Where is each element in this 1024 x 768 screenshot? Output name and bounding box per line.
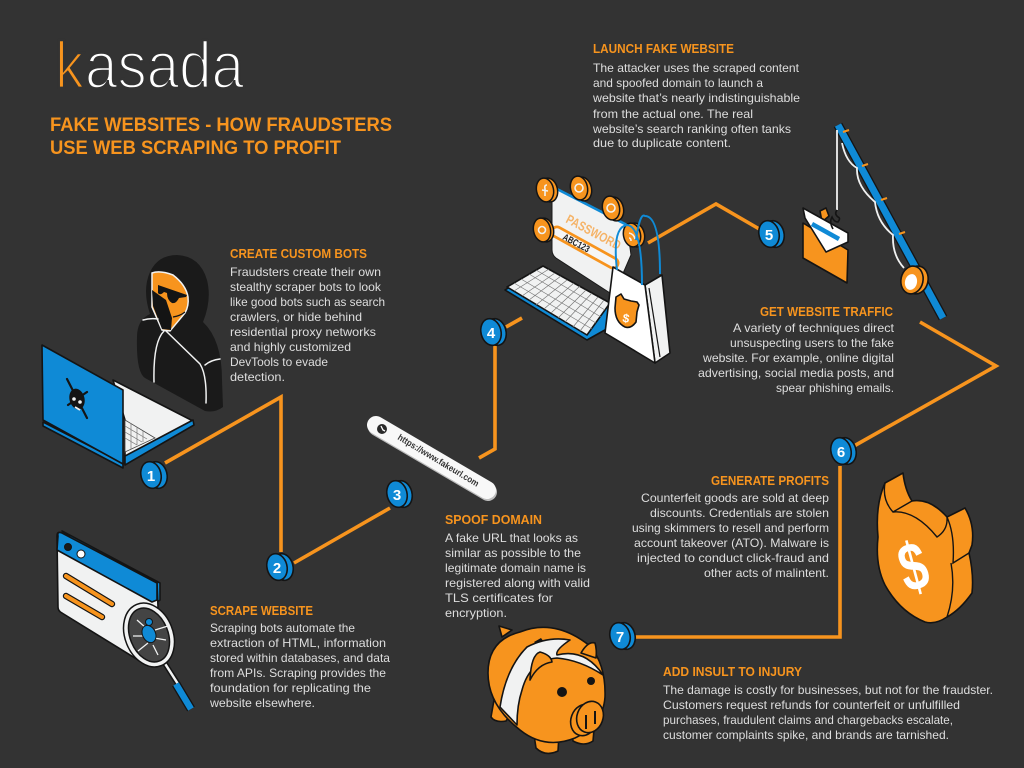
screen: ABC123 bbox=[561, 232, 591, 255]
badge 7 bbox=[607, 620, 638, 652]
body: scrape website: website elsewhere. bbox=[209, 696, 315, 710]
screen bbox=[552, 187, 631, 293]
body: create custom bots: stealthy scraper bots to look bbox=[230, 280, 382, 294]
body: scrape website: stored within databases, and data bbox=[210, 651, 390, 665]
badge 2: 2 bbox=[273, 560, 281, 577]
title bbox=[50, 114, 392, 159]
body: create custom bots: crawlers, or hide behind bbox=[230, 310, 362, 324]
heading: generate profits: GENERATE PROFITS bbox=[711, 474, 829, 488]
body: generate profits: using skimmers to resell and perform bbox=[632, 521, 829, 535]
body: generate profits: Counterfeit goods are sold at deep bbox=[641, 491, 829, 505]
text block: create custom bots bbox=[230, 247, 385, 384]
body: spoof domain: similar as possible to the bbox=[445, 546, 581, 560]
body: create custom bots: Fraudsters create their own bbox=[230, 265, 381, 279]
badge 4: 4 bbox=[487, 325, 496, 342]
skull on laptop lid bbox=[67, 379, 87, 418]
body: generate profits: injected to conduct click-fraud and bbox=[637, 551, 829, 565]
title: FAKE WEBSITES - HOW FRAUDSTERS bbox=[50, 114, 392, 136]
shopping bag: $ bbox=[621, 311, 631, 326]
body: launch fake website: The attacker uses the scraped content bbox=[593, 61, 800, 75]
icon: URL bar: https://www.fakeurl.com bbox=[396, 432, 481, 489]
badge 6 bbox=[828, 435, 859, 467]
rod bbox=[837, 125, 943, 318]
connector path: step 3 to 5 bbox=[479, 204, 761, 458]
body: generate profits: account takeover (ATO). Malware is bbox=[634, 536, 829, 550]
text block: spoof domain bbox=[445, 513, 590, 620]
body: launch fake website: website’s search ranking often tanks bbox=[592, 122, 791, 136]
icon: fishing rod with phishing envelope bbox=[803, 125, 943, 318]
body: add insult to injury: The damage is costly for businesses, but not for the fraudster. bbox=[663, 683, 993, 697]
badge 7: 7 bbox=[616, 629, 624, 646]
icon: hooded fraudster bbox=[137, 255, 223, 412]
body: scrape website: extraction of HTML, information bbox=[210, 636, 386, 650]
icon: dollar coin: $ bbox=[890, 526, 936, 607]
body: launch fake website: from the actual one. The real bbox=[593, 107, 753, 121]
badge 6: 6 bbox=[837, 444, 845, 461]
title: USE WEB SCRAPING TO PROFIT bbox=[50, 137, 341, 159]
body: spoof domain: A fake URL that looks as bbox=[445, 531, 578, 545]
social coins bbox=[531, 174, 647, 249]
body: create custom bots: like good bots such as search bbox=[230, 295, 385, 309]
badge 1: 1 bbox=[147, 468, 155, 485]
body: spoof domain: TLS certificates for bbox=[445, 591, 553, 605]
body: launch fake website: and spoofed domain to launch a bbox=[593, 76, 763, 90]
body: spoof domain bbox=[445, 531, 590, 620]
body: create custom bots: DevTools to evade bbox=[230, 355, 328, 369]
body: create custom bots: detection. bbox=[230, 370, 285, 384]
heading: create custom bots: CREATE CUSTOM BOTS bbox=[230, 247, 367, 261]
icon: laptop with skull bbox=[42, 345, 194, 468]
icon: browser window with magnifier and bug bbox=[57, 531, 191, 709]
body: add insult to injury bbox=[663, 683, 993, 742]
text block: generate profits bbox=[632, 474, 829, 580]
text block: add insult to injury bbox=[663, 665, 993, 742]
badge 3 bbox=[384, 478, 415, 510]
body: add insult to injury: purchases, fraudulent claims and chargebacks escalate, bbox=[663, 713, 953, 727]
connector path: step 5 to 7 bbox=[634, 322, 996, 637]
icon: bandaged piggy bank bbox=[488, 626, 608, 753]
body: launch fake website bbox=[592, 61, 800, 150]
keyboard bbox=[505, 266, 612, 340]
connector path: step 1 to 3 bbox=[165, 397, 390, 563]
body: spoof domain: encryption. bbox=[445, 606, 507, 620]
badge 3: 3 bbox=[393, 487, 401, 504]
body: get website traffic: A variety of techniques direct bbox=[733, 321, 895, 335]
logo: kasada: k bbox=[55, 28, 85, 102]
body: launch fake website: due to duplicate content. bbox=[593, 136, 731, 150]
body: scrape website: Scraping bots automate the bbox=[210, 621, 355, 635]
heading: launch fake website: LAUNCH FAKE WEBSITE bbox=[593, 42, 734, 56]
body: get website traffic bbox=[698, 321, 895, 395]
icon: dollar coin bbox=[877, 473, 973, 623]
shopping bag bbox=[605, 216, 670, 363]
body: generate profits: discounts. Credentials are stolen bbox=[650, 506, 829, 520]
logo: kasada: asada bbox=[85, 28, 244, 102]
heading: scrape website: SCRAPE WEBSITE bbox=[210, 604, 313, 618]
body: scrape website bbox=[209, 621, 390, 710]
body: launch fake website: website that’s nearly indistinguishable bbox=[592, 91, 800, 105]
badge 2 bbox=[264, 551, 296, 583]
text block: scrape website bbox=[209, 604, 390, 710]
text block: launch fake website bbox=[592, 42, 800, 150]
body: generate profits bbox=[632, 491, 829, 580]
body: add insult to injury: customer complaints spike, and brands are tarnished. bbox=[663, 728, 949, 742]
screen: PASSWORD bbox=[564, 211, 624, 253]
body: get website traffic: website. For example, online digital bbox=[702, 351, 894, 365]
icon: laptop with password screen and shopping bag bbox=[505, 174, 670, 363]
body: create custom bots: residential proxy networks bbox=[230, 325, 376, 339]
body: create custom bots bbox=[230, 265, 385, 384]
body: generate profits: other acts of malintent. bbox=[704, 566, 829, 580]
body: scrape website: from APIs. Scraping provides the bbox=[210, 666, 386, 680]
icon: URL bar bbox=[376, 424, 488, 492]
heading: add insult to injury: ADD INSULT TO INJURY bbox=[663, 665, 803, 679]
body: get website traffic: advertising, social media posts, and bbox=[698, 366, 894, 380]
badge 4 bbox=[478, 316, 509, 348]
body: scrape website: foundation for replicating the bbox=[210, 681, 371, 695]
body: spoof domain: registered along with valid bbox=[445, 576, 590, 590]
badge 1 bbox=[138, 459, 170, 491]
text block: get website traffic bbox=[698, 305, 895, 395]
badge 5: 5 bbox=[765, 227, 773, 244]
envelope bbox=[803, 208, 848, 283]
body: add insult to injury: Customers request refunds for counterfeit or unfulfilled bbox=[663, 698, 960, 712]
body: spoof domain: legitimate domain name is bbox=[445, 561, 586, 575]
body: get website traffic: spear phishing emails. bbox=[776, 381, 894, 395]
body: get website traffic: unsuspecting users to the fake bbox=[730, 336, 894, 350]
body: create custom bots: and highly customized bbox=[230, 340, 351, 354]
heading: spoof domain: SPOOF DOMAIN bbox=[445, 513, 542, 527]
heading: get website traffic: GET WEBSITE TRAFFIC bbox=[760, 305, 893, 319]
badge 5 bbox=[756, 218, 787, 250]
